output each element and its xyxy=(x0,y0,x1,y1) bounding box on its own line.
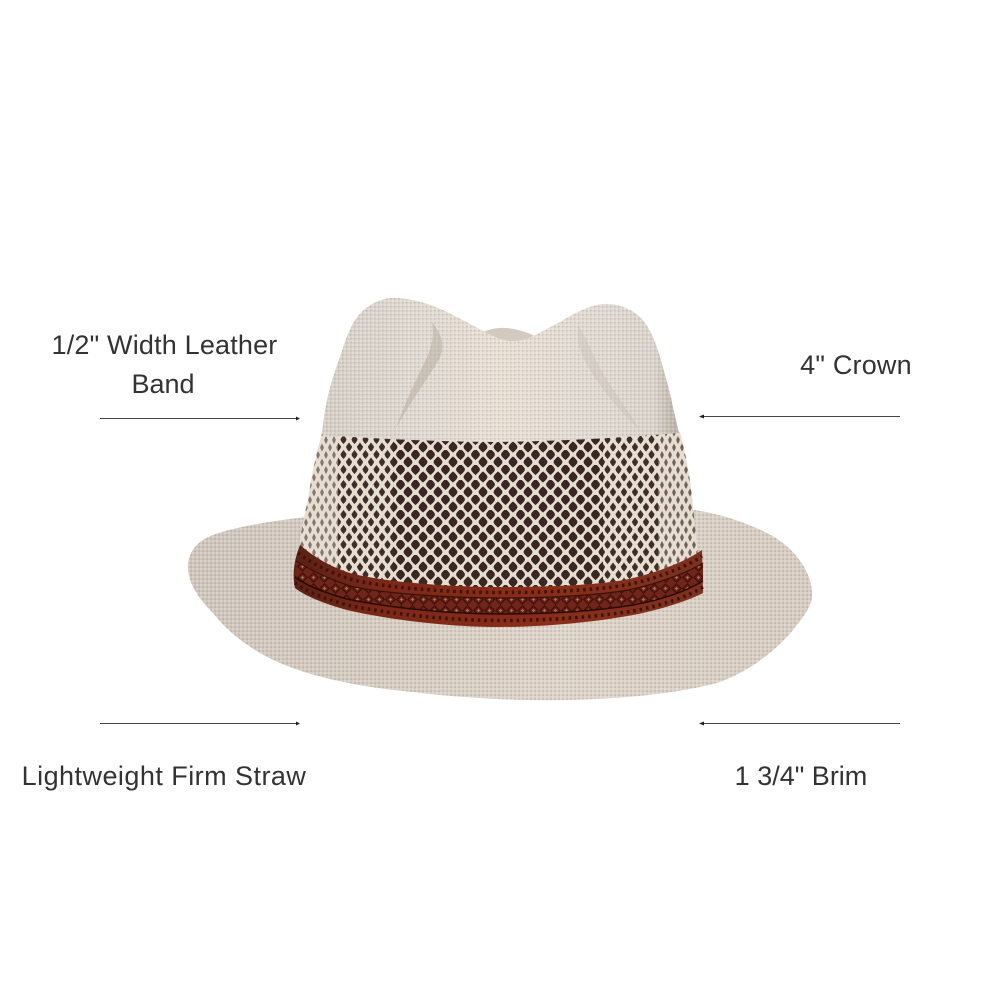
label: leather band: 1/2" Width Leather xyxy=(52,330,277,360)
label: crown: 4" Crown xyxy=(800,350,912,380)
arrow: leather band xyxy=(100,416,300,420)
infographic: hat specifications xyxy=(24,298,910,790)
back of crown xyxy=(483,328,535,345)
hat illustration xyxy=(188,298,812,700)
label: leather band xyxy=(52,330,277,399)
band diamond strip xyxy=(295,562,703,614)
ventilated mesh crown section xyxy=(299,432,698,587)
label: leather band: Band xyxy=(131,369,195,399)
arrow: straw xyxy=(100,722,300,726)
upper crown xyxy=(322,298,679,442)
arrow: brim xyxy=(699,722,900,726)
label: brim: 1 3/4" Brim xyxy=(735,761,867,791)
leather band xyxy=(290,545,705,627)
label: straw: Lightweight Firm Straw xyxy=(22,761,306,791)
hat brim xyxy=(188,500,812,700)
crown pinch shading xyxy=(396,322,442,428)
arrow: crown xyxy=(699,414,900,418)
